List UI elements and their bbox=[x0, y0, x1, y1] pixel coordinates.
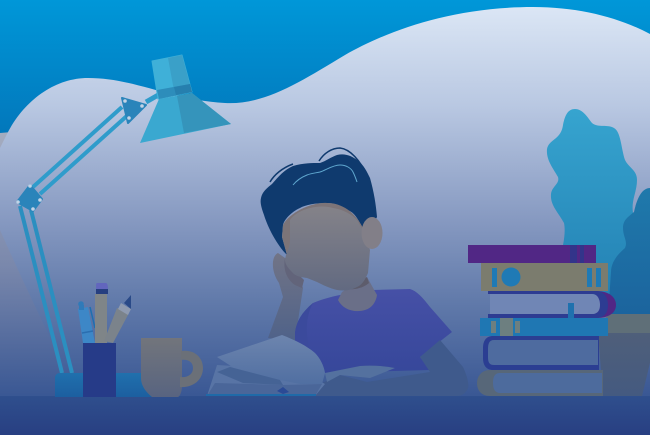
right page bbox=[325, 366, 395, 382]
bookmark bbox=[277, 387, 289, 394]
tan book bbox=[481, 263, 608, 291]
student figure bbox=[206, 148, 468, 396]
shirt shade bbox=[295, 303, 313, 358]
left background sliver bbox=[0, 132, 90, 400]
arm propping head bbox=[268, 253, 303, 341]
front leaf bbox=[608, 188, 650, 316]
lamp triangle joint bbox=[122, 98, 146, 123]
purple book bbox=[468, 245, 596, 263]
lower arm bbox=[315, 340, 468, 396]
hair wisp left bbox=[270, 164, 293, 182]
neck shadow bbox=[345, 277, 369, 289]
hair wisp right bbox=[319, 148, 368, 177]
ear bbox=[362, 217, 382, 249]
neck bbox=[338, 277, 377, 311]
back leaf bbox=[547, 109, 637, 300]
book cover edge bbox=[206, 394, 316, 396]
hair highlight bbox=[293, 165, 357, 185]
plant bbox=[547, 109, 650, 316]
lamp neck bbox=[146, 94, 160, 102]
sky background bbox=[0, 0, 650, 150]
lamp elbow joint bbox=[16, 184, 42, 211]
slanted pencil bbox=[104, 295, 131, 343]
navy outlined book bbox=[483, 336, 599, 370]
face bbox=[285, 206, 370, 291]
lamp shade bbox=[140, 55, 231, 143]
hair bbox=[261, 154, 377, 255]
shirt bbox=[295, 289, 452, 373]
lamp arm upper bbox=[33, 107, 129, 194]
pot body bbox=[598, 333, 650, 396]
desk bbox=[0, 396, 650, 435]
lamp arm lower bbox=[20, 206, 72, 373]
upright pencil bbox=[95, 283, 108, 343]
pencil cup bbox=[83, 343, 116, 397]
open book bbox=[206, 335, 395, 396]
book base bbox=[207, 365, 325, 396]
hand shade bbox=[284, 258, 304, 288]
grey book bbox=[477, 370, 603, 396]
pens and pencil holder bbox=[78, 283, 131, 397]
coffee mug bbox=[141, 338, 203, 397]
pot rim bbox=[598, 314, 650, 333]
lamp base bbox=[55, 373, 153, 397]
blue book bbox=[480, 318, 608, 336]
stack of books bbox=[468, 245, 616, 396]
desk lamp bbox=[16, 55, 231, 373]
hair shade bbox=[282, 203, 363, 262]
plant pot bbox=[598, 314, 650, 396]
left page bbox=[217, 335, 325, 384]
lower left page bbox=[207, 383, 322, 396]
inner page bbox=[217, 367, 283, 385]
white page book with purple spine bbox=[488, 291, 616, 322]
pen bbox=[78, 301, 95, 343]
